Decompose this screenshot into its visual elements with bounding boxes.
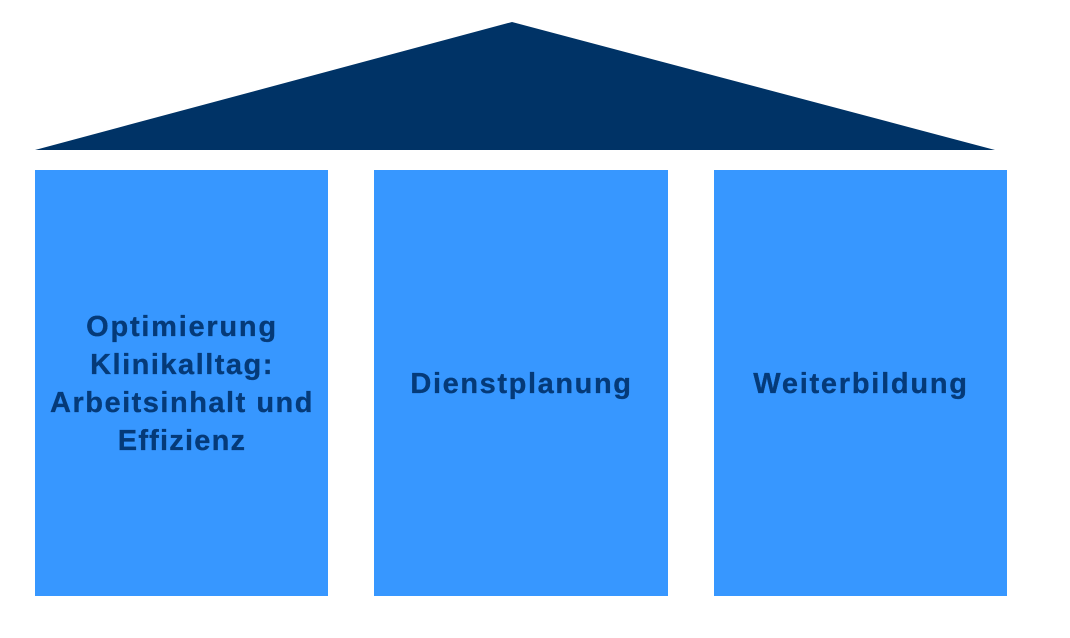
- label: Optimierung Klinikalltag: Arbeitsinhalt und: [50, 387, 314, 419]
- label: Optimierung Klinikalltag: Optimierung: [86, 311, 278, 343]
- label: Optimierung Klinikalltag: [50, 311, 314, 457]
- label: Optimierung Klinikalltag: Effizienz: [118, 425, 246, 457]
- panel: Weiterbildung: [714, 170, 1007, 596]
- panel: Dienstplanung: [374, 170, 668, 596]
- label: Weiterbildung: Weiterbildung: [753, 368, 969, 400]
- label: Optimierung Klinikalltag: Klinikalltag:: [90, 349, 274, 381]
- label: Dienstplanung: Dienstplanung: [410, 368, 633, 400]
- panel: Optimierung Klinikalltag: [35, 170, 328, 596]
- roof triangle: [35, 22, 995, 150]
